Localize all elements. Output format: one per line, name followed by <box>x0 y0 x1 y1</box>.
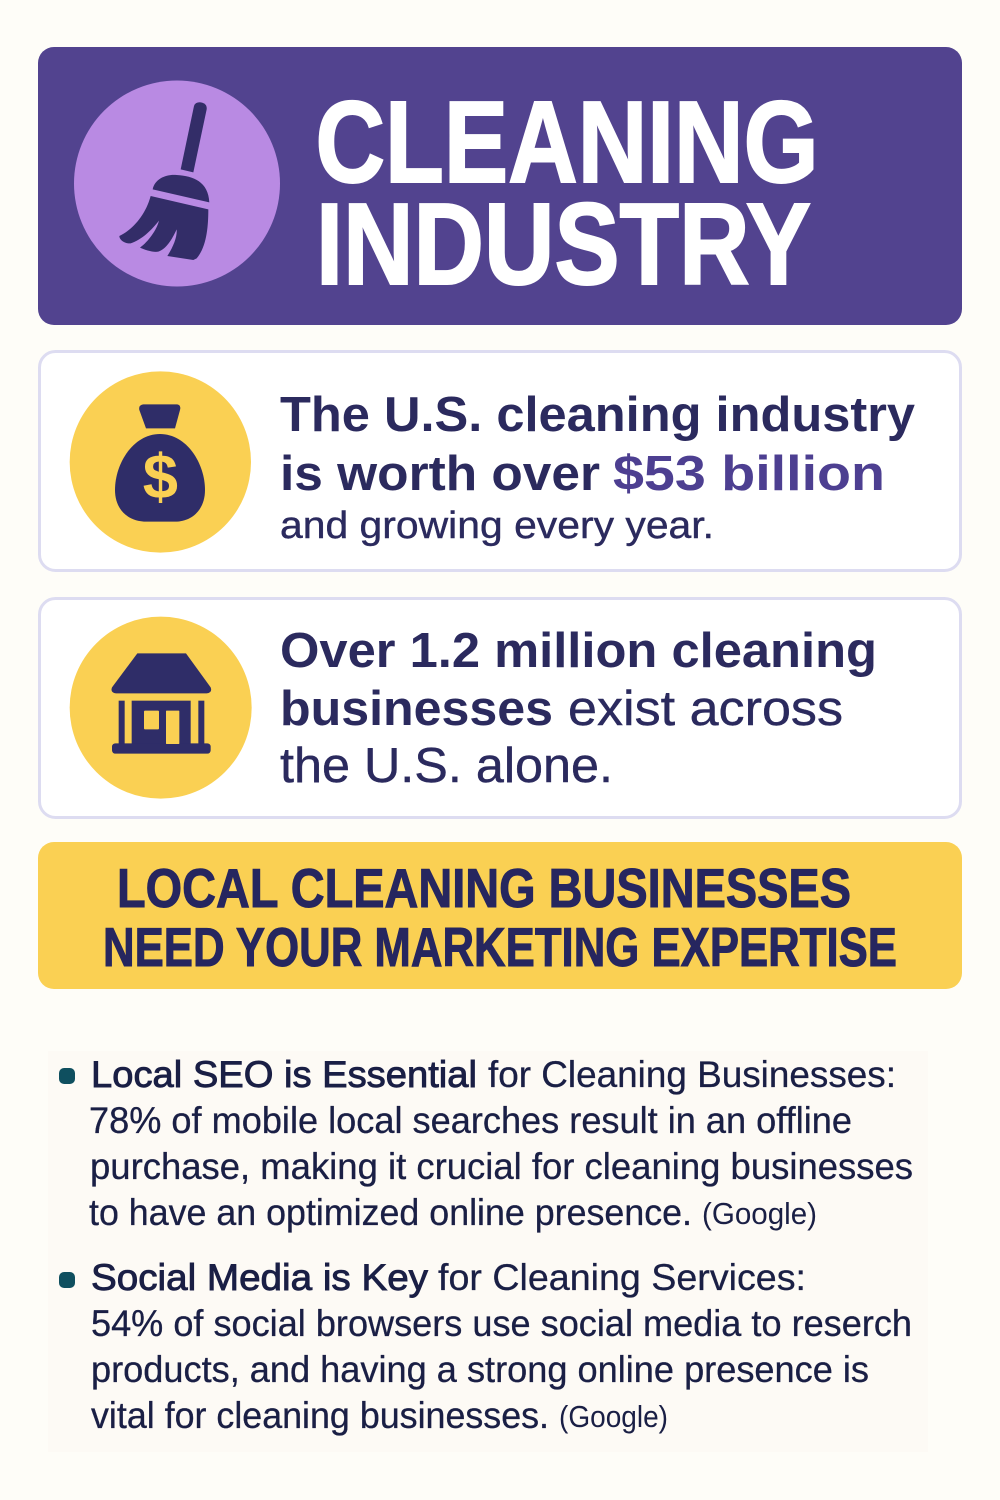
text: market value: The U.S. cleaning industry <box>280 388 915 442</box>
list item: social media: for Cleaning Services: <box>438 1257 806 1298</box>
text: market value: and growing every year. <box>280 505 714 547</box>
icon: money bag <box>70 371 251 553</box>
list item: social media: Social Media is Key <box>91 1257 429 1298</box>
panel: market value card <box>40 352 960 570</box>
icon: money bag: $ <box>143 442 178 512</box>
text: business count: Over 1.2 million cleaning <box>280 624 877 678</box>
list item: local SEO: 78% of mobile local searches result in an offline <box>89 1100 852 1141</box>
text: business count: the U.S. alone. <box>280 739 613 793</box>
list item: local SEO <box>59 1054 913 1233</box>
panel: title banner <box>38 47 962 325</box>
list item: local SEO: for Cleaning Businesses: <box>488 1054 896 1095</box>
text: business count <box>280 624 877 793</box>
text: business count: businesses <box>280 682 553 736</box>
text: market value: $53 billion <box>613 447 885 501</box>
panel: business count card <box>40 598 960 818</box>
text: market value <box>280 388 915 547</box>
text: business count: exist across <box>568 682 843 736</box>
icon: broom in circle <box>74 80 280 286</box>
text: market value: is worth over <box>280 447 600 501</box>
list item: social media <box>59 1257 912 1436</box>
list item: local SEO: purchase, making it crucial for cleaning businesses <box>90 1146 913 1187</box>
panel: yellow callout <box>38 842 962 989</box>
list item: local SEO: Local SEO is Essential <box>91 1054 477 1095</box>
callout heading: LOCAL CLEANING BUSINESSES <box>117 857 851 919</box>
icon: bullet <box>59 1272 75 1288</box>
list item: social media: vital for cleaning businesses. <box>91 1395 549 1436</box>
list item: social media: 54% of social browsers use social media to reserch <box>91 1303 912 1344</box>
list item: local SEO: (Google) <box>702 1196 817 1231</box>
list item: social media: products, and having a strong online presence is <box>91 1349 869 1390</box>
panel: statistics list <box>48 1051 928 1452</box>
callout heading <box>103 857 897 978</box>
icon: building <box>70 617 252 799</box>
list item: local SEO: to have an optimized online presence. <box>89 1192 692 1233</box>
title: INDUSTRY <box>316 179 811 309</box>
icon: bullet <box>59 1068 75 1084</box>
title: CLEANING <box>316 77 818 207</box>
title <box>316 77 818 309</box>
list item: social media: (Google) <box>559 1399 668 1434</box>
